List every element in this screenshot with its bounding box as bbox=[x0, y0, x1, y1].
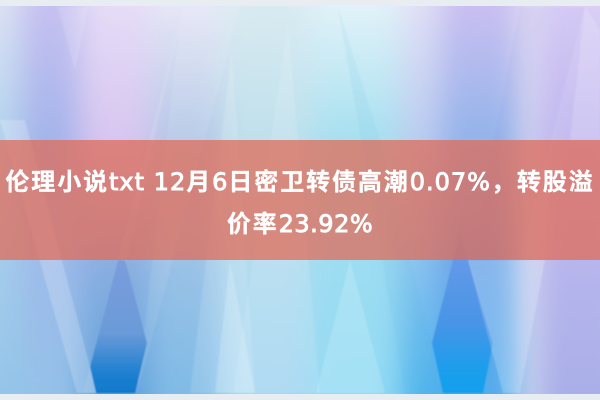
title bbox=[5, 162, 595, 239]
title band bbox=[0, 140, 600, 260]
title: 价率23.92% bbox=[227, 204, 373, 239]
title: 伦理小说txt 12月6日密卫转债高潮0.07%，转股溢 bbox=[5, 162, 595, 197]
